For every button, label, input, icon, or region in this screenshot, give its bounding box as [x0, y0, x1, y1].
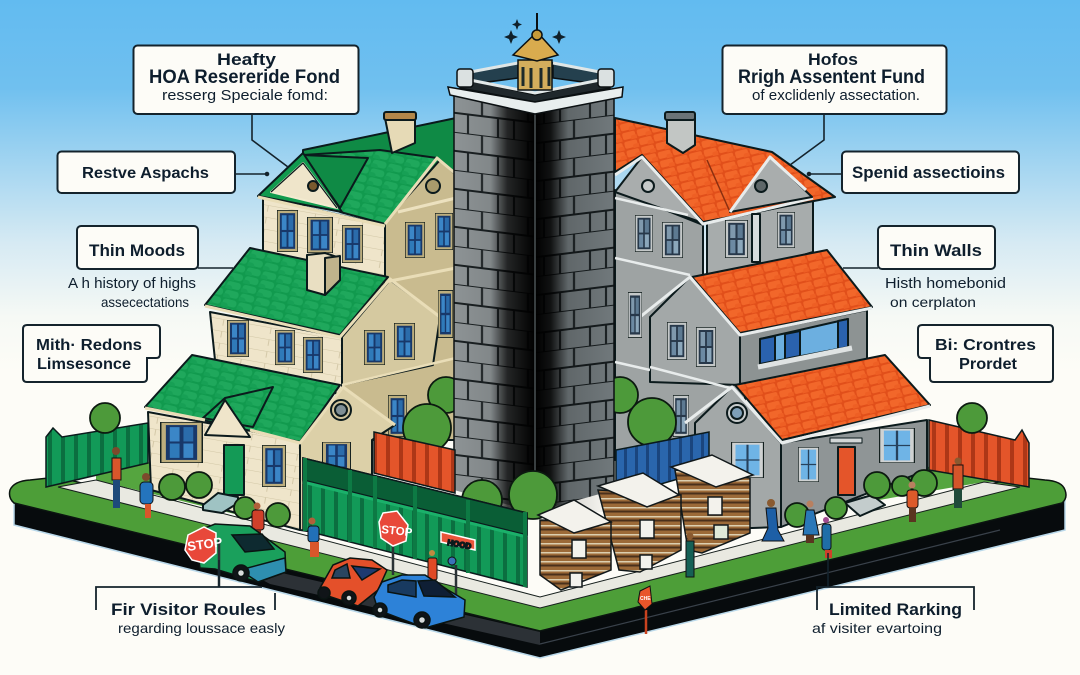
stop sign: center: STOP	[381, 524, 413, 539]
paper stacks	[538, 455, 753, 590]
right house: upper windows	[635, 212, 795, 258]
person: right orange	[907, 482, 918, 522]
left house: top level	[258, 112, 456, 440]
fence: left green	[46, 423, 148, 487]
note: history of highs	[68, 276, 196, 310]
person: right dark green	[686, 532, 694, 577]
door: green	[224, 445, 244, 495]
person: right blue walker	[762, 499, 784, 541]
people	[112, 447, 963, 580]
right house: middle windows	[628, 292, 716, 437]
callout: Mith Redons Limsesonce	[23, 325, 160, 382]
rear bushes	[403, 377, 676, 452]
fence: blue back-right	[616, 432, 709, 497]
person: red at sign	[428, 550, 437, 580]
tower balustrade	[457, 63, 614, 102]
person: far right	[953, 458, 963, 508]
fence: right orange	[929, 420, 1029, 487]
callout: Thin Moods: Thin Moods	[89, 241, 185, 260]
person: left blue	[140, 473, 153, 518]
callout: Thin Moods	[77, 226, 198, 269]
right house: bottom windows	[731, 428, 915, 482]
stack 2	[598, 473, 681, 572]
stack 3	[671, 455, 753, 553]
label: Limited Rarking: Limited Rarking	[829, 600, 962, 619]
label: Limited Rarking	[812, 587, 974, 636]
person: right blue coat	[803, 500, 819, 543]
callout: Hofos Rrigh Assentent Fund: Hofos	[808, 50, 858, 69]
callout: Restve Aspachs	[58, 152, 235, 193]
left house: bottom windows	[160, 422, 351, 487]
note: history of highs: A h history of highs	[68, 276, 196, 292]
label: Fir Visitor Roules: Fir Visitor Roules	[111, 600, 266, 619]
vehicle: green truck	[197, 524, 286, 582]
cupola	[513, 13, 558, 90]
callout: Thin Walls	[878, 226, 995, 269]
sparkle stars	[504, 19, 566, 44]
label: Limited Rarking: af visiter evartoing	[812, 620, 942, 636]
right house: upper walls and roof	[615, 112, 835, 460]
chimney: left top	[384, 112, 416, 153]
chimney: left middle	[307, 253, 340, 295]
door: orange	[838, 447, 855, 495]
note: history of highs: assecectations	[101, 294, 189, 310]
callout: Thin Walls: Thin Walls	[890, 241, 982, 260]
fences	[46, 420, 1029, 497]
right house: bottom level	[685, 355, 930, 530]
callout: Heafty HOA Resererıde Fond: HOA Resereride Fond	[149, 67, 340, 88]
callout: Spenid assections	[842, 152, 1019, 193]
left house: top windows	[277, 210, 453, 263]
left house: middle windows	[227, 290, 453, 437]
person: right blue curb	[822, 517, 832, 558]
right house: middle level	[615, 250, 872, 388]
stop sign: left: STOP	[186, 534, 224, 554]
steps	[203, 493, 238, 513]
person: left orange	[112, 447, 121, 508]
street sign post: blue	[448, 557, 456, 595]
callout: Hofos Rrigh Assentent Fund: of exclidenly assectation.	[752, 88, 920, 104]
callout: Mith Redons Limsesonce: Limsesonce	[37, 356, 131, 373]
callout: Heafty HOA Resererıde Fond: resserg Speciale fomd:	[162, 88, 328, 104]
callout: Bi Crontres Prordet	[918, 325, 1053, 382]
left house: bottom level	[145, 355, 395, 540]
callout: Hofos Rrigh Assentent Fund	[722, 46, 946, 114]
left house: middle level	[205, 248, 456, 395]
leader lines	[198, 114, 878, 587]
callout: Bi Crontres Prordet: Bi: Crontres	[935, 337, 1036, 354]
callout: Heafty HOA Resererıde Fond: Heafty	[217, 50, 277, 69]
ground platform	[10, 462, 1066, 658]
sign: HOOD: HOOD	[447, 538, 472, 551]
small curb sign	[638, 586, 652, 634]
note: homebonid	[885, 276, 1006, 310]
hedge bushes	[90, 403, 987, 527]
label: Fir Visitor Roules	[96, 587, 285, 636]
fence: orange back-left	[374, 432, 455, 493]
callout: Restve Aspachs: Restve Aspachs	[82, 165, 209, 182]
person: blue at fence	[308, 518, 319, 557]
note: homebonid: on cerplaton	[890, 294, 976, 310]
stop sign: left	[185, 527, 224, 587]
central brick tower	[448, 13, 623, 512]
callout: Heafty HOA Resererıde Fond	[134, 46, 358, 114]
chimney: right top	[665, 112, 695, 153]
stop sign: center	[379, 511, 413, 575]
front green fence	[303, 458, 527, 587]
person: red near house	[252, 502, 264, 541]
callout: Spenid assections: Spenid assectioins	[852, 163, 1005, 182]
label: Fir Visitor Roules: regarding loussace easly	[118, 620, 285, 636]
sign: HOOD	[441, 532, 475, 551]
note: homebonid: Histh homebonid	[885, 276, 1006, 292]
tower cornice	[448, 87, 623, 114]
vehicle: blue car	[373, 575, 465, 628]
stack 1	[538, 500, 611, 590]
callout: Hofos Rrigh Assentent Fund: Rrigh Assentent Fund	[738, 67, 925, 88]
callout: Mith Redons Limsesonce: Mith· Redons	[36, 337, 142, 354]
small curb sign: CHE	[640, 596, 651, 602]
callout: Bi Crontres Prordet: Prordet	[959, 356, 1018, 373]
vehicle: red car	[318, 558, 387, 606]
